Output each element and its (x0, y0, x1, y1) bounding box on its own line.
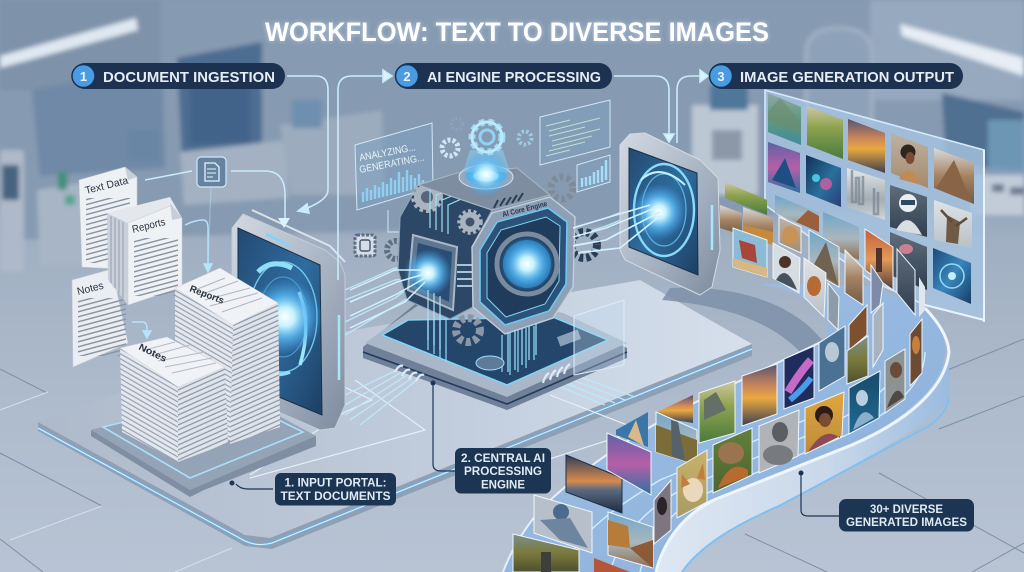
photo: woman yellow background (805, 392, 844, 454)
document icon with connectors (145, 157, 290, 228)
image gallery wall panel (720, 90, 984, 330)
photo: sky and cliffs (775, 195, 819, 232)
callout: input portal: TEXT DOCUMENTS (280, 491, 391, 503)
photo: corgi dog (677, 450, 707, 518)
title: WORKFLOW: TEXT TO DIVERSE IMAGES (265, 17, 769, 47)
callout: input portal: 1. INPUT PORTAL: (284, 478, 386, 490)
photo: olive road (656, 412, 697, 465)
document base plate (91, 392, 316, 497)
photo: smiling person (773, 243, 800, 293)
callout: input portal (230, 473, 396, 506)
curved ribbon conveyor (503, 284, 949, 572)
arrow: output portal to generation (677, 70, 708, 143)
photo: android (534, 495, 592, 553)
input tablet portal (232, 210, 345, 430)
floating chip icon (355, 235, 375, 256)
photo: purple aurora (607, 433, 651, 495)
photo: blue sky peak (823, 212, 859, 260)
photo: goat (934, 200, 972, 248)
photo: lake mountains (768, 93, 801, 145)
photo: nebula (784, 346, 814, 409)
step header 3 (709, 63, 963, 89)
photo: green valley (807, 106, 843, 159)
document sheet: text data (79, 167, 137, 270)
core engine label: AI Core Engine (501, 199, 548, 219)
callout: central ai engine (430, 380, 551, 494)
photo: grey arch (871, 265, 883, 313)
ribbon photo strip (513, 303, 922, 572)
floor tile lines (0, 339, 1024, 572)
photo: foggy forest (897, 249, 915, 315)
beam from input tablet to left lens (350, 270, 425, 328)
photo: woman profile (654, 480, 671, 544)
core top face (418, 165, 550, 210)
label: notes sheet: Notes (76, 280, 105, 298)
photo: misty towers (847, 168, 885, 220)
photo: grey blur (828, 283, 839, 330)
panel text: analyzing: ANALYZING... (358, 142, 417, 164)
photo: portrait woman (891, 133, 928, 188)
flow lines: tablet to core (345, 205, 655, 425)
callout: generated images: 30+ DIVERSE (870, 504, 943, 516)
photo: purple mountain (768, 142, 800, 193)
photo: dark orange (849, 305, 867, 350)
paper stack: notes (120, 337, 228, 462)
photo: blue peak (616, 412, 648, 447)
circuit traces under core (428, 290, 536, 372)
photo: shaggy bear (713, 428, 752, 493)
photo: storm wave (819, 326, 845, 391)
photo: sunset ridge (657, 395, 693, 423)
step header 3: 3 (717, 69, 725, 84)
photo: blue circuit sphere (933, 248, 971, 304)
holographic panel: analyzing (355, 123, 433, 232)
photo: dramatic dusk (566, 455, 622, 513)
step header 1: DOCUMENT INGESTION (103, 69, 275, 86)
step header 2 (395, 63, 612, 89)
label: reports sheet: Reports (131, 216, 167, 236)
photo: desert tower at sunset (865, 229, 893, 290)
small arrows between sheets and stacks (132, 187, 212, 338)
label: text data: Text Data (84, 175, 130, 197)
holographic gears (442, 118, 532, 156)
core left face (398, 183, 492, 319)
core base platform (363, 300, 627, 410)
core right octagon face (472, 197, 575, 334)
photo: beige mountain (809, 230, 839, 287)
photo: red rocks (733, 228, 767, 277)
callout: generated images: GENERATED IMAGES (846, 517, 967, 529)
label: reports stack: Reports (188, 284, 225, 307)
photo: lion cub (779, 217, 801, 253)
photo: red sunset (594, 558, 630, 572)
central ai core (363, 118, 627, 410)
paper stack: reports (175, 268, 280, 444)
photo: white strip (919, 277, 925, 317)
holographic panel: code (540, 100, 610, 165)
light beam (462, 150, 510, 198)
photo: galaxy (806, 155, 841, 207)
document sheet: notes (72, 269, 128, 367)
arrow: ai engine to output portal (614, 76, 674, 142)
photo: robot (890, 185, 927, 237)
main floor platform (38, 280, 752, 549)
arrow: ingestion to input portal (287, 76, 328, 213)
photo: calm lake (742, 364, 777, 426)
photo: man portrait (885, 349, 905, 413)
callout: central ai engine: ENGINE (481, 480, 525, 492)
step header 2: 2 (403, 69, 411, 84)
step header 2: AI ENGINE PROCESSING (427, 69, 601, 86)
core side gears (387, 177, 597, 342)
step header 1 (72, 63, 285, 89)
callout: generated images (798, 470, 974, 532)
photo: sunset shore (848, 119, 885, 173)
panel text: generating: GENERATING... (358, 153, 425, 176)
output tablet portal (620, 133, 720, 295)
translucent lower panel (574, 300, 624, 375)
photo: scenic statue (845, 250, 863, 305)
photo: cyber android (849, 371, 880, 434)
step header 3: IMAGE GENERATION OUTPUT (740, 69, 954, 86)
step header 1: 1 (80, 69, 87, 84)
photo: pink clouds (890, 232, 927, 290)
photo: canyon river (608, 512, 653, 568)
photo: orange figure (910, 319, 922, 386)
photo: grey column (873, 303, 883, 367)
photo: olive field (513, 534, 579, 572)
document sheaf: reports (107, 197, 182, 305)
callout: central ai engine: PROCESSING (464, 466, 542, 478)
callout: central ai engine: 2. CENTRAL AI (461, 453, 545, 465)
photo: grey seal (759, 410, 799, 473)
holographic panel: small chart (577, 155, 610, 192)
photo: green waterfall (699, 381, 735, 443)
label: notes stack: Notes (137, 342, 168, 365)
arrow: to ai engine (338, 70, 392, 280)
photo: brown hills (720, 205, 742, 235)
photo: desert peak (934, 148, 974, 204)
photo: green hills (725, 182, 767, 215)
core left lens module (404, 235, 457, 310)
beam from right lens to output tablet (573, 205, 660, 253)
photo: olive forest (847, 336, 868, 384)
photo: orange dunes (743, 207, 773, 245)
photo: orange creature (804, 258, 826, 317)
